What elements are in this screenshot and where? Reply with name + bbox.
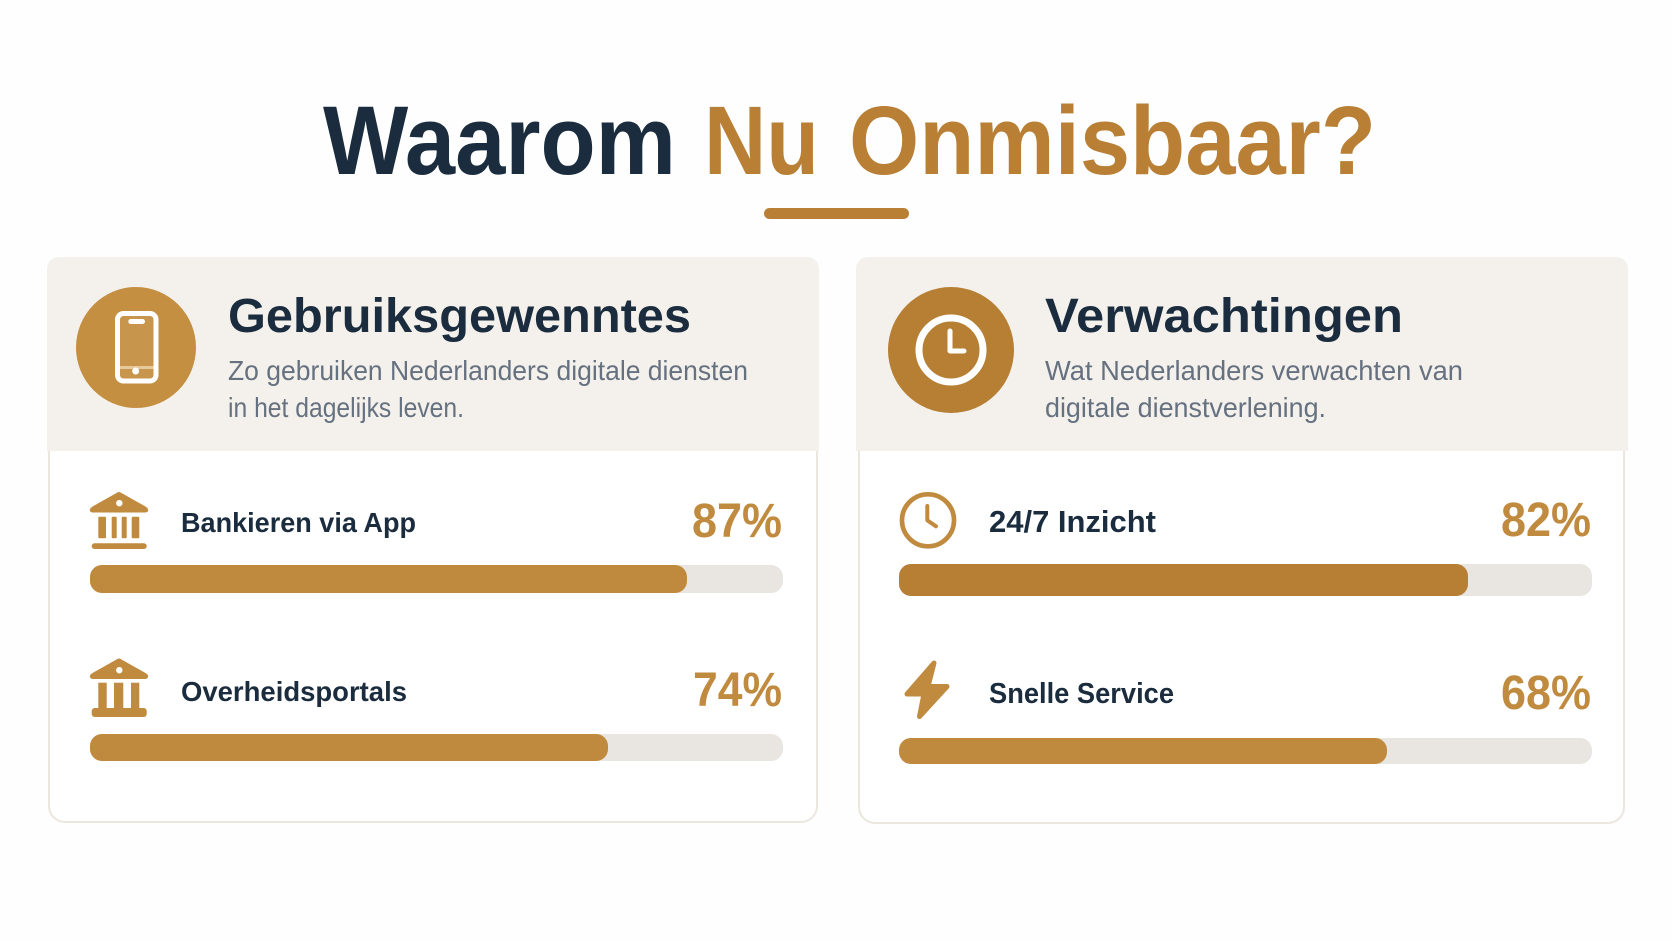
row: Snelle Service [899, 663, 1592, 764]
panel description: Wat Nederlanders verwachten van [1045, 355, 1463, 386]
label: Snelle Service [989, 678, 1174, 710]
icon: bank [90, 492, 148, 549]
progress bar 68% [899, 738, 1592, 764]
icon: clock [888, 287, 1014, 413]
progress bar 87% [90, 565, 783, 593]
value: 68% [1501, 667, 1591, 720]
title: Nu [704, 86, 819, 195]
panel: Gebruiksgewenntes [47, 257, 819, 822]
row: Bankieren via App [90, 492, 783, 593]
title: Waarom [323, 86, 676, 195]
icon: government building [90, 658, 148, 717]
label: Bankieren via App [181, 507, 416, 538]
icon: lightning bolt [907, 663, 947, 716]
label: Overheidsportals [181, 676, 407, 707]
icon: small clock [902, 494, 954, 546]
title underline [764, 208, 909, 219]
icon: smartphone [76, 287, 196, 408]
value: 74% [693, 664, 782, 717]
panel: Verwachtingen [856, 257, 1628, 823]
panel header: Verwachtingen [856, 257, 1628, 451]
label: 24/7 Inzicht [989, 504, 1156, 539]
row: 24/7 Inzicht [899, 494, 1592, 596]
value: 87% [692, 495, 782, 548]
panel description: digitale dienstverlening. [1045, 392, 1326, 423]
progress bar 74% [90, 734, 783, 761]
panel description: Zo gebruiken Nederlanders digitale diensten [228, 355, 748, 386]
panel description: in het dagelijks leven. [228, 392, 464, 423]
row: Overheidsportals [90, 658, 783, 761]
value: 82% [1501, 494, 1591, 547]
panel heading: Verwachtingen [1045, 290, 1403, 343]
panel description [1045, 355, 1463, 423]
panel heading: Gebruiksgewenntes [228, 290, 691, 343]
panel header: Gebruiksgewenntes [47, 257, 819, 451]
title [323, 86, 1376, 195]
panel description [228, 355, 748, 423]
progress bar 82% [899, 564, 1592, 596]
title: Onmisbaar? [849, 86, 1376, 195]
